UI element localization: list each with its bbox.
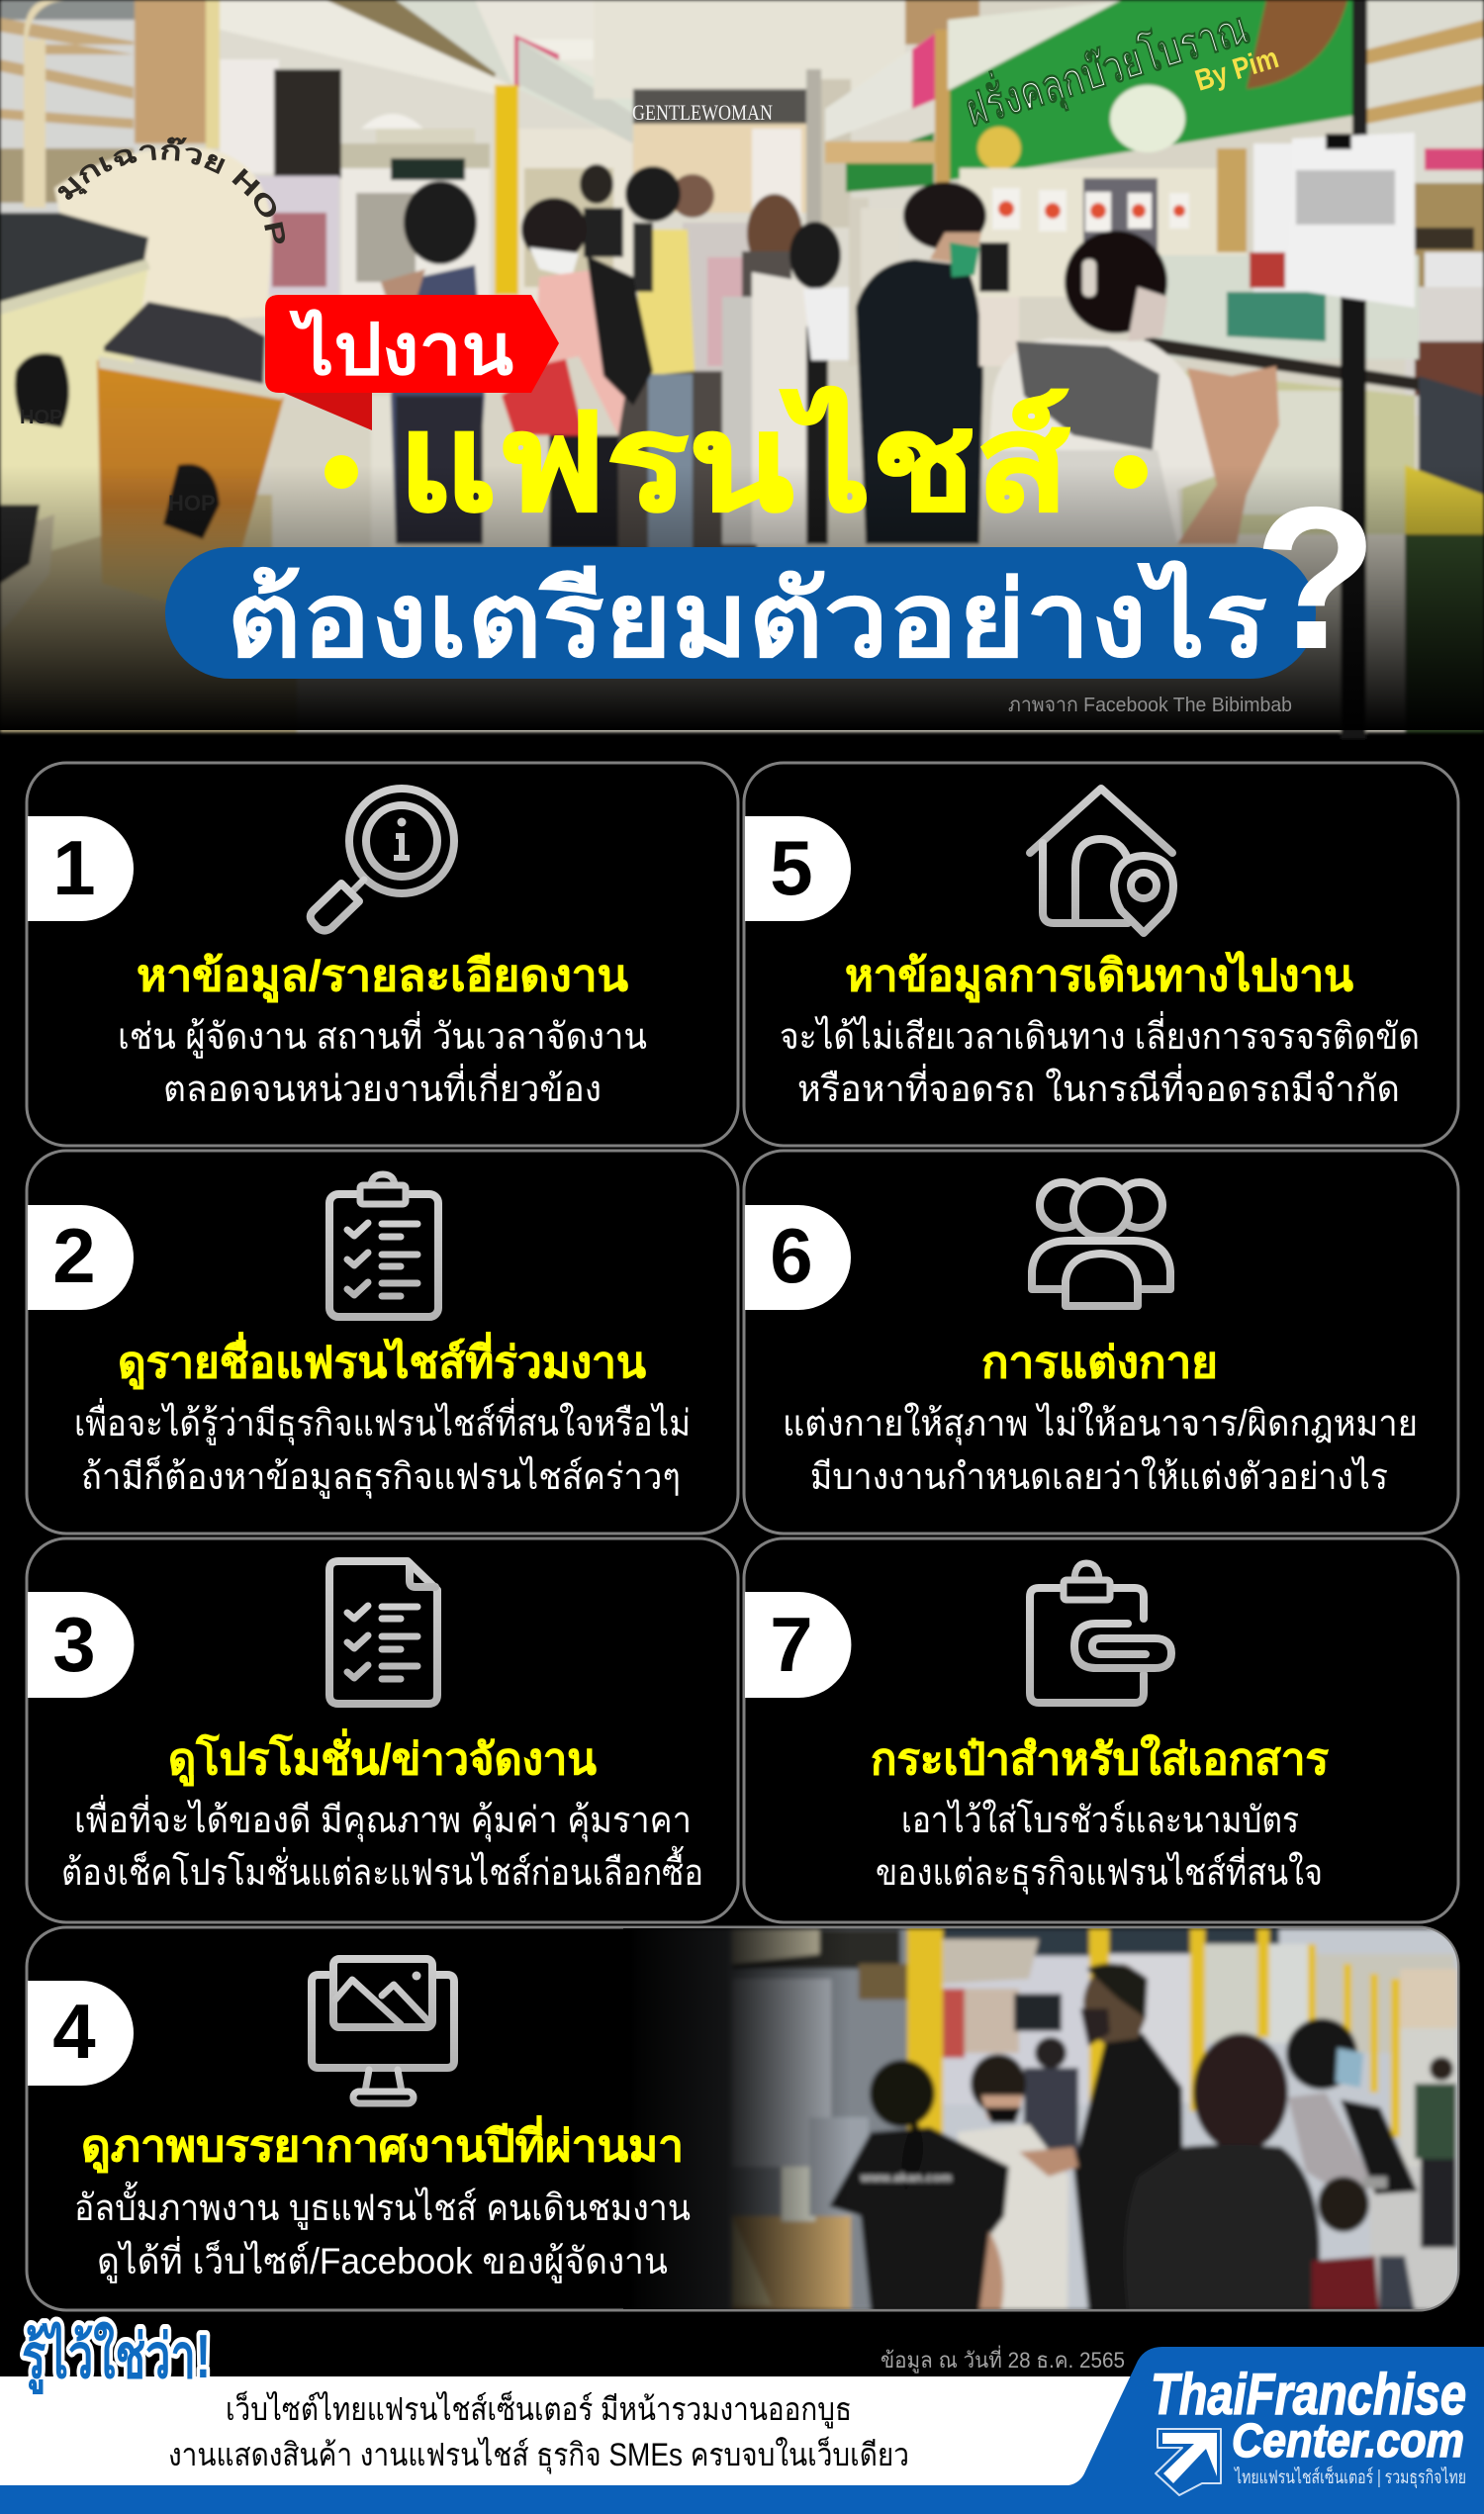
body 1 [118, 1010, 647, 1109]
table items [732, 2216, 851, 2310]
body 5: หรือหาที่จอดรถ ในกรณีที่จอดรถมีจำกัด [797, 1063, 1400, 1109]
event photo [623, 1928, 1464, 2310]
girl in pink [521, 198, 587, 261]
logo arrow icon [1156, 2429, 1221, 2495]
icon: magnifier with info [311, 789, 454, 930]
cup one [0, 265, 148, 554]
number tab 5: 5 [770, 824, 813, 911]
number tab 7: 7 [770, 1601, 813, 1688]
paper notice [1253, 143, 1338, 292]
photo signage text: HOP [20, 407, 62, 428]
footer blue band and logo panel [0, 2347, 1484, 2514]
body 6 [783, 1402, 1418, 1497]
card 4 with event photo [27, 1927, 1464, 2310]
heading 4: ดูภาพบรรยากาศงานปีที่ผ่านมา [81, 2115, 684, 2173]
photo signage text: By Pim [1191, 42, 1282, 98]
title question pill: blue: ? [1253, 465, 1378, 692]
card 2 [27, 1151, 738, 1534]
body 2: เพื่อจะได้รู้ว่ามีธุรกิจแฟรนไชส์ที่สนใจหรือไม่ [74, 1397, 691, 1445]
body 4: อัลบั้มภาพงาน บูธแฟรนไชส์ คนเดินชมงาน [74, 2181, 691, 2230]
body 4 [74, 2181, 691, 2283]
card 6 [744, 1151, 1458, 1534]
number tab 2: 2 [52, 1212, 96, 1299]
body 5: จะได้ไม่เสียเวลาเดินทาง เลี่ยงการจรจรติดขัด [780, 1010, 1420, 1057]
child [1318, 2177, 1369, 2232]
footer body text [168, 2390, 909, 2474]
footer white band [0, 2376, 1187, 2485]
body 2 [74, 1397, 691, 1499]
title tag: red label: ไปงาน [289, 308, 513, 390]
heading 6: การแต่งกาย [981, 1339, 1218, 1387]
title question pill: blue: ต้องเตรียมตัวอย่างไร [227, 560, 1267, 679]
body 3: เพื่อที่จะได้ของดี มีคุณภาพ คุ้มค่า คุ้มราคา [74, 1794, 692, 1842]
shop shelf behind man [849, 198, 869, 366]
body 7: เอาไว้ใส่โบรชัวร์และนามบัตร [901, 1799, 1299, 1840]
heading 1: หาข้อมูล/รายละเอียดงาน [137, 952, 628, 1002]
photo signage text: HOP [168, 491, 216, 515]
number tab 6 [745, 1205, 851, 1310]
HOP sign board [54, 148, 272, 326]
heading 5: หาข้อมูลการเดินทางไปงาน [845, 950, 1353, 1002]
number tab 7 [745, 1592, 851, 1698]
woman black tee [829, 2127, 1009, 2310]
card 5 [744, 763, 1458, 1146]
woman floral [1288, 2093, 1370, 2206]
upper centre light ceiling and beams [220, 0, 950, 297]
logo: ThaiFranchise Center.com: Center.com [1232, 2415, 1464, 2467]
footer body text: งานแสดงสินค้า งานแฟรนไชส์ ธุรกิจ SMEs ครบจบในเว็บเดียว [168, 2436, 909, 2474]
body 6: มีบางงานกำหนดเลยว่าให้แต่งตัวอย่างไร [810, 1455, 1388, 1497]
icon: clipboard checklist [329, 1174, 438, 1317]
number tab 3 [28, 1592, 134, 1698]
title main word: yellow: แฟรนไชส์ [398, 386, 1069, 538]
girl in white coat [958, 2124, 1068, 2310]
photo credit: ภาพจาก Facebook The Bibimbab [1008, 695, 1292, 716]
body 2: ถ้ามีก็ต้องหาข้อมูลธุรกิจแฟรนไชส์คร่าวๆ [81, 1453, 681, 1499]
card 7 [744, 1538, 1458, 1922]
card 1 [27, 763, 738, 1146]
mall entrance [594, 0, 905, 99]
title question pill: blue [165, 465, 1378, 692]
body 1: เช่น ผู้จัดงาน สถานที่ วันเวลาจัดงาน [118, 1010, 647, 1059]
photo signage text [20, 0, 1298, 549]
logo: ThaiFranchise Center.com [1151, 2363, 1466, 2495]
body 5 [780, 1010, 1420, 1109]
body 1: ตลอดจนหน่วยงานที่เกี่ยวข้อง [163, 1063, 602, 1109]
icon: checklist document [329, 1561, 437, 1704]
footer [0, 2321, 1484, 2514]
photo signage text: GENTLEWOMAN [632, 100, 773, 125]
did-you-know badge: รู้ไว้ใช่ว่า! [22, 2321, 211, 2394]
man in green [1430, 2057, 1453, 2081]
man navy polo [856, 259, 983, 544]
number tab 1: 1 [52, 824, 96, 911]
crowd [618, 366, 757, 554]
body 7 [876, 1799, 1323, 1895]
footer body text: เว็บไซต์ไทยแฟรนไชส์เซ็นเตอร์ มีหน้ารวมงานออกบูธ [226, 2390, 852, 2429]
body 3 [61, 1794, 703, 1893]
heading 2: ดูรายชื่อแฟรนไชส์ที่ร่วมงาน [118, 1332, 646, 1389]
heading 3: ดูโปรโมชั่น/ข่าวจัดงาน [168, 1728, 597, 1786]
number tab 5 [745, 816, 851, 921]
woman in gingham dress [983, 338, 1219, 544]
red shopping bag [502, 350, 584, 435]
fade photo into black [623, 1928, 851, 2310]
heading 7: กระเป๋าสำหรับใส่เอกสาร [871, 1733, 1329, 1784]
number tab 4 [28, 1981, 134, 2086]
woman dark back [1193, 2033, 1288, 2152]
icon: group of people [1032, 1181, 1170, 1306]
body 4: ดูได้ที่ เว็บไซต์/Facebook ของผู้จัดงาน [97, 2235, 668, 2283]
man in black jacket [1073, 2033, 1183, 2310]
icon: house with location pin [1030, 789, 1173, 933]
data date note: ข้อมูล ณ วันที่ 28 ธ.ค. 2565 [881, 2345, 1125, 2374]
cup two [97, 360, 284, 618]
photo signage text: มุกเฉาก๊วย HOP [57, 137, 285, 243]
title tag: red label [265, 295, 559, 430]
number tab 6: 6 [770, 1212, 813, 1299]
card 3 [27, 1538, 738, 1922]
number tab 2 [28, 1205, 134, 1310]
body 6: แต่งกายให้สุภาพ ไม่ให้อนาจาร/ผิดกฎหมาย [783, 1402, 1418, 1445]
body 7: ของแต่ละธุรกิจแฟรนไชส์ที่สนใจ [876, 1846, 1323, 1895]
centre woman short hair [404, 181, 477, 264]
body 3: ต้องเช็คโปรโมชั่นแต่ละแฟรนไชส์ก่อนเลือกซื้อ [61, 1845, 703, 1893]
icon: monitor with picture [312, 1959, 454, 2103]
number tab 1 [28, 816, 134, 921]
glass counter and salad [1145, 255, 1419, 359]
dark fade at the bottom of the photo [0, 465, 1484, 730]
background people [1024, 2068, 1078, 2167]
number tab 3: 3 [52, 1601, 96, 1688]
left floor and radiator [0, 495, 297, 732]
header photo: franchise expo crowd [0, 0, 1484, 740]
number tab 4: 4 [52, 1988, 96, 2075]
event photo: www.akan.com [860, 2171, 952, 2185]
right booth banners [905, 0, 979, 45]
title [165, 295, 1378, 692]
icon: clipboard with paper clip [1030, 1563, 1171, 1703]
